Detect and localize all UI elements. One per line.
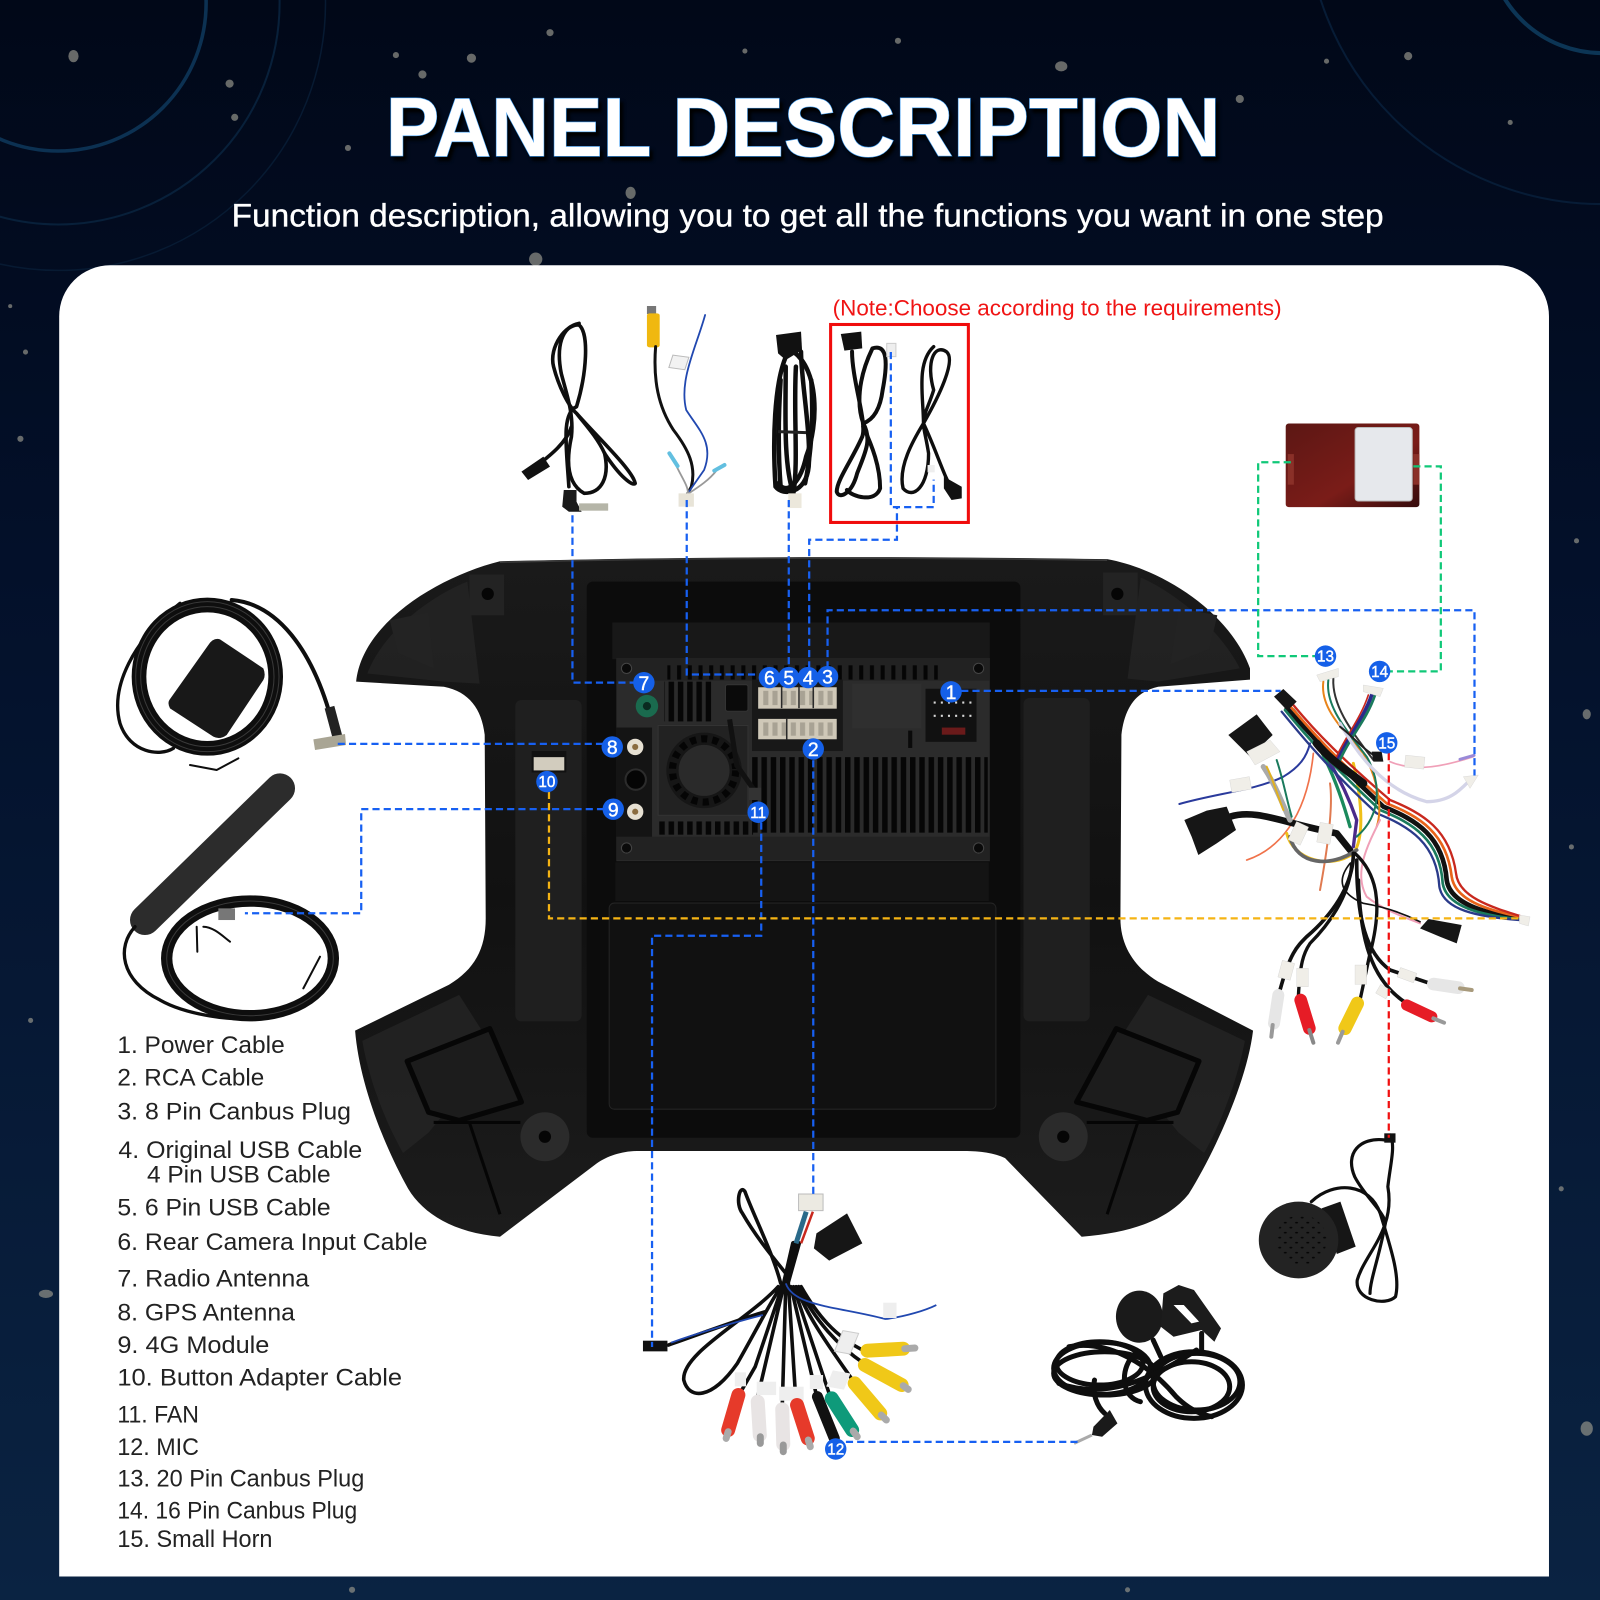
harness plugs and tags: [1230, 668, 1530, 999]
note: (Note:Choose according to the requirements): [833, 295, 1282, 320]
head unit back panel: [355, 557, 1253, 1237]
canbus box: [1286, 423, 1419, 507]
top bracket: [612, 622, 990, 659]
parts list: 9. 4G Module: [117, 1332, 269, 1359]
numbered badges: 9: [608, 799, 619, 821]
panel: white card: [59, 265, 1549, 1577]
parts list: 13. 20 Pin Canbus Plug: [117, 1466, 364, 1493]
parts list: 4 Pin USB Cable: [147, 1162, 331, 1189]
numbered badges: 1: [946, 682, 956, 704]
numbered badges: 5: [783, 668, 794, 690]
power socket: [926, 689, 977, 742]
parts list: [117, 1032, 428, 1553]
parts list: 6. Rear Camera Input Cable: [117, 1229, 428, 1256]
numbered badges: 12: [827, 1442, 844, 1459]
numbered badges: 15: [1378, 735, 1395, 752]
4 pin USB cable: [902, 347, 962, 500]
parts list: 7. Radio Antenna: [117, 1266, 310, 1293]
4G antenna: [124, 788, 333, 1019]
4G socket: [627, 804, 643, 820]
head unit body: [616, 658, 990, 861]
parts list: 8. GPS Antenna: [117, 1299, 295, 1326]
button adapter socket: [532, 751, 566, 772]
bottom strip: [616, 837, 990, 860]
numbered badges: 11: [750, 805, 766, 822]
parts list: 2. RCA Cable: [117, 1065, 264, 1092]
parts list: 12. MIC: [117, 1434, 199, 1461]
connector lines: [245, 352, 1520, 1442]
numbered badges: 10: [538, 774, 555, 791]
rear camera cable: [647, 306, 724, 507]
parts list: 15. Small Horn: [117, 1526, 272, 1553]
numbered badges: 4: [803, 668, 814, 690]
top vent strip: [616, 658, 990, 681]
small horn: [1259, 1133, 1397, 1301]
numbered badges: 7: [638, 673, 649, 695]
harness connectors: [1184, 689, 1462, 943]
numbered badges: 14: [1371, 664, 1389, 681]
parts list: 3. 8 Pin Canbus Plug: [117, 1098, 351, 1125]
heatsink fins: [751, 757, 988, 833]
wiring harness: [1179, 668, 1530, 1043]
numbered badges: 3: [822, 667, 833, 689]
lower wings: [407, 1029, 521, 1120]
left I/O block: [616, 728, 652, 837]
original USB cable: [837, 332, 896, 497]
parts list: 10. Button Adapter Cable: [117, 1365, 402, 1392]
RCA cable bundle: [643, 1190, 936, 1452]
numbered badges: 6: [764, 668, 775, 690]
red option box: [831, 324, 968, 522]
radio antenna cable: [521, 323, 635, 512]
microphone: [1054, 1285, 1242, 1443]
lower bracket: [609, 903, 996, 1109]
title: PANEL DESCRIPTION: [386, 80, 1220, 174]
connector 2: [758, 718, 837, 740]
shoulder shading: [362, 578, 1245, 1153]
side plate right: [1023, 698, 1090, 1021]
connectors 3 to 6: [758, 687, 837, 709]
optical port: [726, 685, 748, 711]
bezel outline: [355, 557, 1253, 1237]
top rim highlight: [500, 558, 1107, 562]
side plate left: [515, 700, 582, 1021]
numbered badges: 8: [607, 737, 618, 759]
parts list: 4. Original USB Cable: [118, 1137, 362, 1164]
parts list: 11. FAN: [117, 1401, 199, 1428]
GPS socket: [627, 739, 643, 755]
radio antenna socket: [636, 695, 658, 717]
numbered badges: 2: [808, 739, 819, 761]
central column: [587, 582, 1020, 1138]
parts list: 14. 16 Pin Canbus Plug: [117, 1497, 357, 1524]
subtitle: Function description, allowing you to get all the functions you want in one step: [232, 197, 1384, 234]
numbered badges: 13: [1317, 649, 1334, 666]
fan: [658, 719, 761, 815]
shoulder mounts: [390, 572, 1217, 668]
RCA plugs: [1271, 984, 1472, 1043]
6 pin USB cable: [774, 332, 815, 508]
GPS antenna: [118, 600, 346, 770]
parts list: 1. Power Cable: [117, 1032, 285, 1059]
numbered badges: [536, 645, 1397, 1460]
parts list: 5. 6 Pin USB Cable: [117, 1194, 331, 1221]
connector surround: [752, 680, 843, 751]
